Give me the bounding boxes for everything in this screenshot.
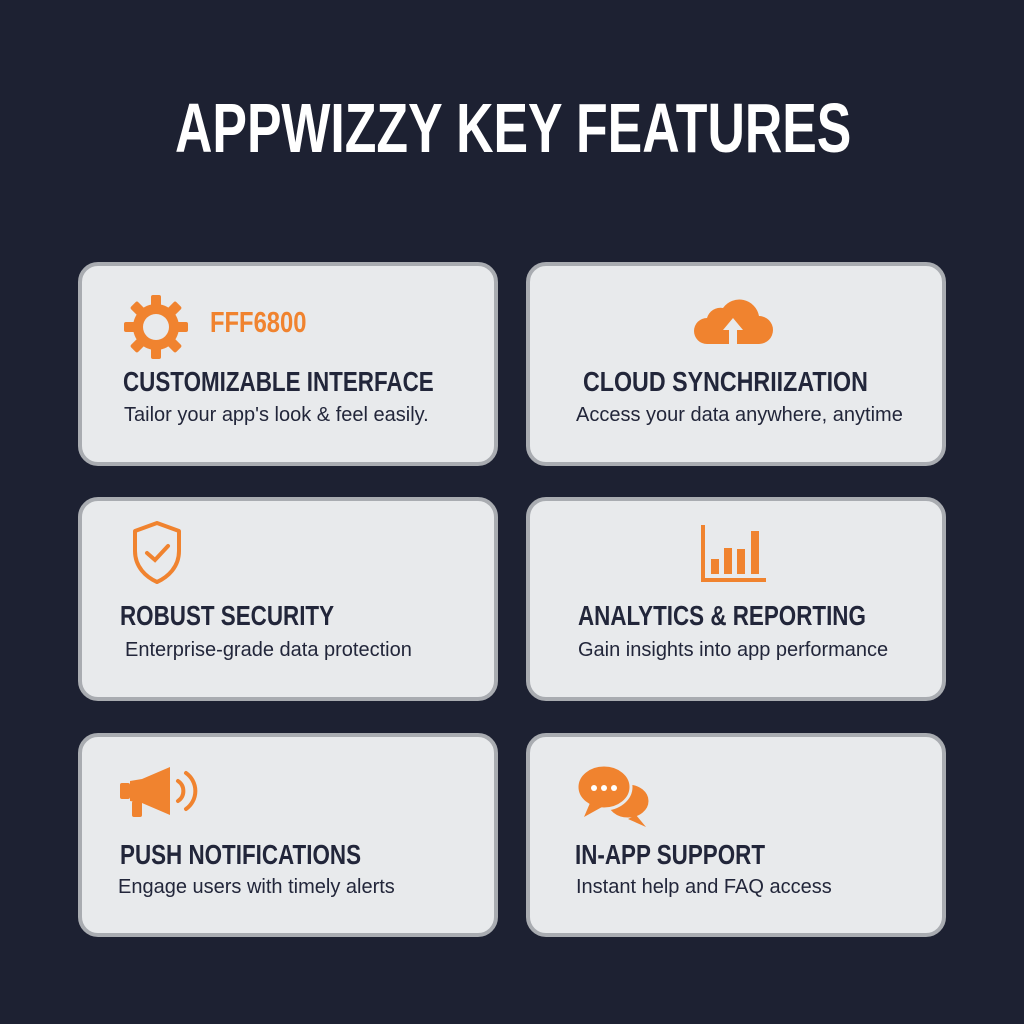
icon: shield	[133, 521, 181, 584]
panel: in-app support	[526, 733, 946, 937]
icon: bar chart	[701, 525, 766, 582]
label: FFF6800: FFF6800	[210, 307, 306, 339]
description: Instant help and FAQ access	[576, 876, 832, 898]
heading: CUSTOMIZABLE INTERFACE	[123, 366, 434, 397]
panel: push notifications	[78, 733, 498, 937]
description: Access your data anywhere, anytime	[576, 404, 903, 426]
panel: analytics	[526, 497, 946, 701]
icon: cloud upload	[694, 300, 773, 344]
heading: PUSH NOTIFICATIONS	[120, 839, 361, 870]
panel: cloud synchronization	[526, 262, 946, 466]
icon: megaphone	[120, 767, 198, 817]
icon: gear	[124, 295, 188, 359]
heading: IN-APP SUPPORT	[575, 839, 765, 870]
description: Gain insights into app performance	[578, 639, 888, 661]
description: Engage users with timely alerts	[118, 876, 395, 898]
description: Tailor your app's look & feel easily.	[124, 404, 429, 426]
icon: chat bubbles	[578, 766, 648, 827]
title: APPWIZZY KEY FEATURES	[175, 89, 851, 167]
heading: ANALYTICS & REPORTING	[578, 600, 866, 631]
panel: customizable interface	[78, 262, 498, 466]
description: Enterprise-grade data protection	[125, 639, 412, 661]
heading: ROBUST SECURITY	[120, 600, 334, 631]
panel: robust security	[78, 497, 498, 701]
heading: CLOUD SYNCHRIIZATION	[583, 366, 868, 397]
